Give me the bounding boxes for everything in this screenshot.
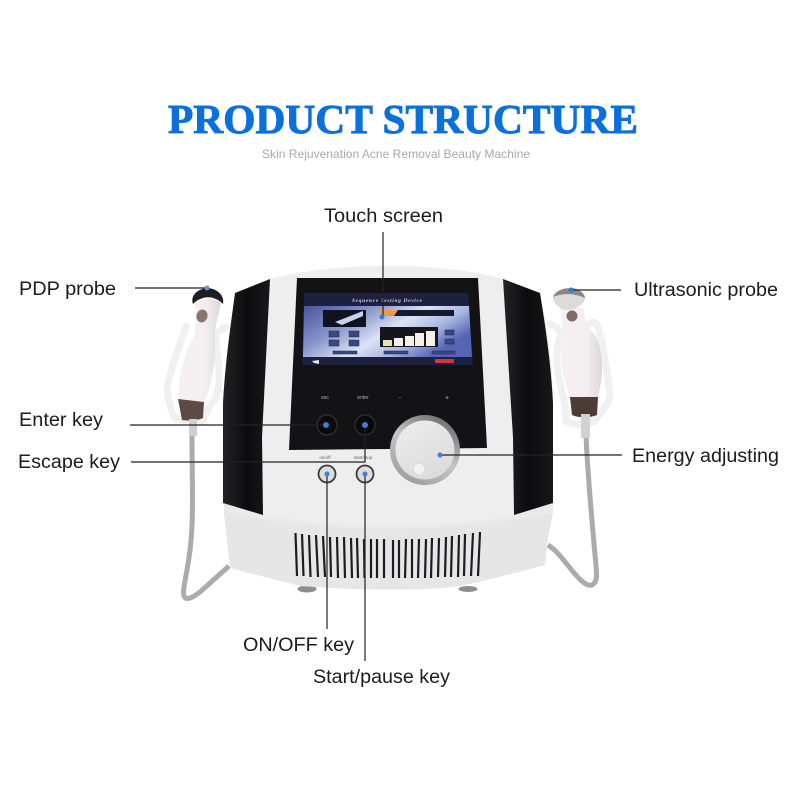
touch screen — [302, 293, 473, 365]
callout: touch screen — [324, 206, 443, 320]
machine body — [223, 266, 553, 590]
on/off and start keys — [318, 466, 374, 482]
lower key labels: start/stop — [354, 455, 373, 460]
upper highlight — [262, 266, 514, 525]
screen footer — [435, 359, 454, 363]
screen level chart — [380, 327, 438, 347]
panel key labels: esc — [321, 395, 329, 401]
callout: enter key — [19, 410, 329, 431]
title: PRODUCT STRUCTURE — [168, 96, 638, 142]
holder — [167, 326, 226, 421]
head — [553, 288, 585, 310]
window — [195, 308, 209, 324]
subtitle: Skin Rejuvenation Acne Removal Beauty Machine — [262, 147, 530, 161]
right probe — [550, 288, 610, 438]
body — [560, 308, 602, 398]
lower body shade — [224, 513, 553, 590]
callout: escape key — [18, 422, 368, 473]
control panel — [289, 278, 487, 450]
right cable — [548, 436, 597, 585]
left black side panel — [223, 279, 270, 515]
label: Touch screen — [324, 206, 443, 227]
lower key labels — [319, 455, 373, 460]
energy dial — [390, 415, 460, 485]
collar — [570, 397, 598, 417]
window — [566, 310, 578, 322]
vent slats — [296, 532, 480, 578]
screen thumbnail — [323, 310, 366, 327]
esc/enter knobs — [317, 415, 375, 435]
label: Ultrasonic probe — [634, 280, 778, 301]
left probe — [167, 288, 226, 436]
collar — [178, 399, 204, 421]
left cable — [184, 436, 229, 599]
label: Start/pause key — [313, 667, 451, 688]
panel key labels: enter — [357, 395, 369, 401]
panel key labels: + — [445, 395, 449, 402]
callout: energy adjusting — [438, 446, 779, 467]
callout: ultrasonic probe — [568, 280, 778, 301]
label: ON/OFF key — [243, 635, 355, 656]
screen small buttons — [329, 330, 455, 354]
screen header text: Sequence Testing Device — [352, 298, 423, 304]
label: Enter key — [19, 410, 104, 431]
callout: ON/OFF key — [243, 472, 355, 656]
label: PDP probe — [19, 279, 116, 300]
label: Escape key — [18, 452, 121, 473]
body — [178, 298, 221, 402]
callout: PDP probe — [19, 279, 210, 300]
panel key labels: − — [399, 395, 402, 401]
machine feet — [298, 586, 478, 592]
screen top bar — [380, 310, 454, 316]
machine — [184, 266, 597, 599]
holder — [550, 322, 610, 424]
label: Energy adjusting — [632, 446, 779, 467]
panel key labels — [321, 395, 449, 402]
callout: start/pause key — [313, 472, 451, 688]
head — [192, 288, 223, 304]
lower key labels: on/off — [319, 455, 331, 460]
right black side panel — [503, 279, 553, 515]
